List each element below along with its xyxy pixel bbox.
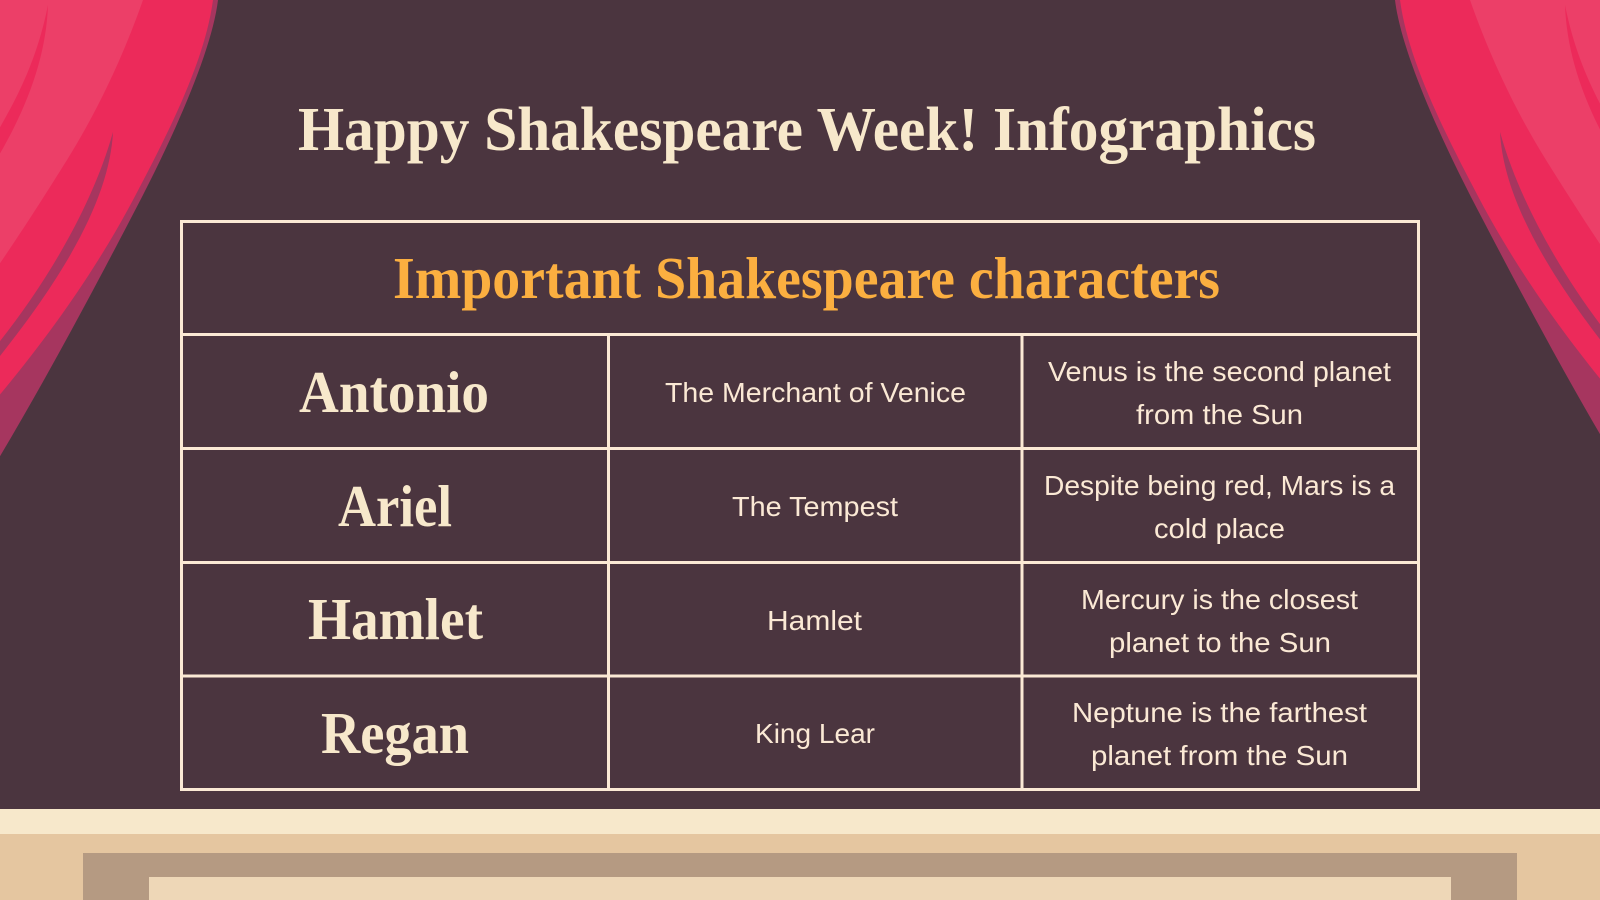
row: Regan: Regan (321, 700, 469, 766)
row: Ariel (338, 470, 1395, 544)
row: Ariel: Despite being red, Mars is a (1044, 470, 1395, 501)
table grid (180, 220, 1420, 791)
row: Regan: King Lear (755, 718, 875, 749)
left curtain (0, 0, 218, 478)
row: Ariel: The Tempest (732, 491, 898, 522)
row: Regan (321, 697, 1367, 771)
row: Hamlet (308, 584, 1358, 658)
row: Antonio: Antonio (299, 359, 489, 425)
row: Hamlet: Hamlet (308, 586, 483, 652)
row: Antonio: The Merchant of Venice (665, 377, 966, 408)
stage (0, 809, 1600, 900)
right curtain (1395, 0, 1600, 478)
row: Ariel: Ariel (338, 473, 452, 539)
table heading: Important Shakespeare characters (393, 245, 1220, 311)
row: Antonio (299, 356, 1391, 430)
row: Antonio: Venus is the second planet (1048, 356, 1391, 387)
stage recess (83, 853, 1517, 900)
table (180, 220, 1420, 791)
row: Regan: Neptune is the farthest (1072, 697, 1367, 728)
row: Hamlet: Hamlet (767, 605, 862, 636)
row: Hamlet: Mercury is the closest (1081, 584, 1358, 615)
stage front edge (0, 809, 1600, 834)
stage recess inner panel (149, 877, 1451, 900)
row: Hamlet: planet to the Sun (1109, 627, 1331, 658)
row: Ariel: cold place (1154, 513, 1285, 544)
stage base (0, 834, 1600, 900)
title: Happy Shakespeare Week! Infographics (298, 96, 1316, 164)
row: Regan: planet from the Sun (1091, 740, 1348, 771)
row: Antonio: from the Sun (1136, 399, 1303, 430)
